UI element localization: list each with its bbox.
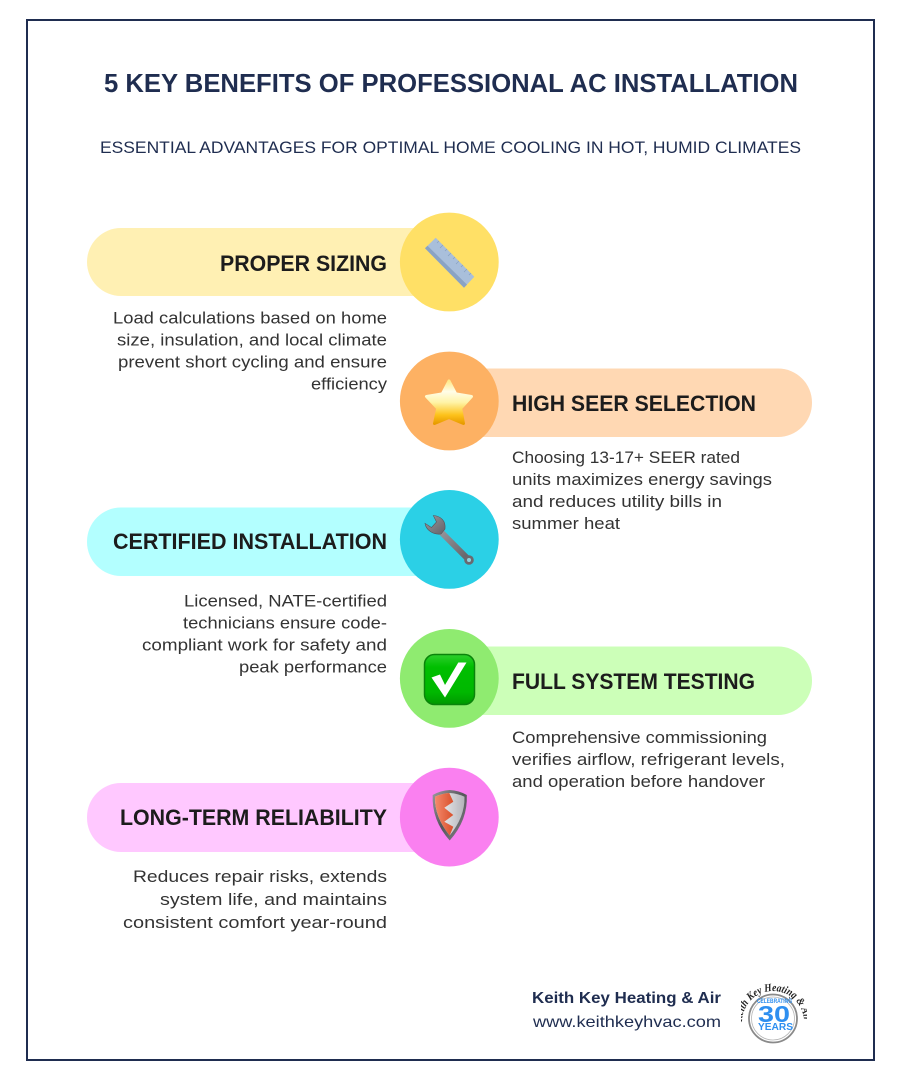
pill: certified installation	[87, 508, 449, 576]
text: proper sizing description: size, insulation, and local climate	[117, 330, 387, 350]
text: high seer selection description: units maximizes energy savings	[512, 470, 772, 489]
text: full system testing description: Comprehensive commissioning	[512, 728, 767, 747]
circle: high seer selection	[400, 352, 499, 450]
text: certified installation description	[142, 592, 387, 676]
text: full system testing description	[512, 728, 785, 791]
panel: high seer selection	[400, 352, 812, 533]
logo: 30 years badge: YEARS	[758, 1022, 793, 1033]
text: certified installation description: compliant work for safety and	[142, 636, 387, 654]
pill: high seer selection	[450, 368, 812, 437]
text: long-term reliability description: system life, and maintains	[160, 890, 387, 909]
text: proper sizing description: efficiency	[311, 374, 388, 394]
heading: long-term reliability: LONG-TERM RELIABILITY	[120, 805, 387, 830]
icon: ruler	[425, 238, 474, 288]
circle: long-term reliability	[400, 768, 499, 866]
text: proper sizing description: prevent short cycling and ensure	[118, 352, 387, 372]
text: high seer selection description: summer heat	[512, 514, 620, 533]
footer: company name: Keith Key Heating & Air	[532, 990, 721, 1007]
heading: proper sizing: PROPER SIZING	[220, 251, 387, 276]
heading: full system testing: FULL SYSTEM TESTING	[512, 669, 755, 694]
panel: long-term reliability	[87, 768, 499, 932]
text: full system testing description: and operation before handover	[512, 772, 765, 791]
footer: website: www.keithkeyhvac.com	[532, 1014, 721, 1031]
text: high seer selection description: Choosing 13-17+ SEER rated	[512, 448, 740, 467]
panel: proper sizing	[87, 213, 499, 394]
circle: certified installation	[400, 490, 499, 589]
logo: 30 years badge	[741, 984, 807, 1044]
text: full system testing description: verifies airflow, refrigerant levels,	[512, 750, 785, 769]
heading: high seer selection: HIGH SEER SELECTION	[512, 391, 756, 416]
text: certified installation description: Licensed, NATE-certified	[184, 592, 387, 610]
text: certified installation description: technicians ensure code-	[183, 614, 387, 632]
text: long-term reliability description	[123, 867, 387, 932]
text: proper sizing description	[113, 308, 388, 394]
pill: long-term reliability	[87, 783, 449, 852]
panel: certified installation	[87, 490, 499, 676]
text: proper sizing description: Load calculations based on home	[113, 308, 387, 328]
logo: 30 years badge: CELEBRATING	[757, 999, 792, 1005]
icon: star	[426, 381, 472, 424]
text: long-term reliability description: Reduces repair risks, extends	[133, 867, 387, 886]
logo: 30 years badge: Keith Key Heating & Air	[741, 984, 807, 1022]
circle: full system testing	[400, 629, 499, 728]
logo: 30 years badge: 30	[758, 1001, 790, 1027]
icon: wrench	[425, 516, 474, 565]
icon: check mark	[424, 654, 474, 704]
title: 5 KEY BENEFITS OF PROFESSIONAL AC INSTALLATION	[104, 68, 798, 98]
text: high seer selection description: and reduces utility bills in	[512, 492, 722, 511]
subtitle: ESSENTIAL ADVANTAGES FOR OPTIMAL HOME COOLING IN HOT, HUMID CLIMATES	[100, 138, 801, 157]
text: certified installation description: peak performance	[239, 658, 387, 676]
text: high seer selection description	[512, 448, 772, 533]
circle: proper sizing	[400, 213, 499, 311]
panel: full system testing	[400, 629, 812, 791]
heading: certified installation: CERTIFIED INSTALLATION	[113, 529, 387, 554]
icon: shield	[433, 790, 467, 840]
pill: proper sizing	[87, 228, 449, 296]
text: long-term reliability description: consistent comfort year-round	[123, 913, 387, 932]
pill: full system testing	[450, 646, 812, 715]
